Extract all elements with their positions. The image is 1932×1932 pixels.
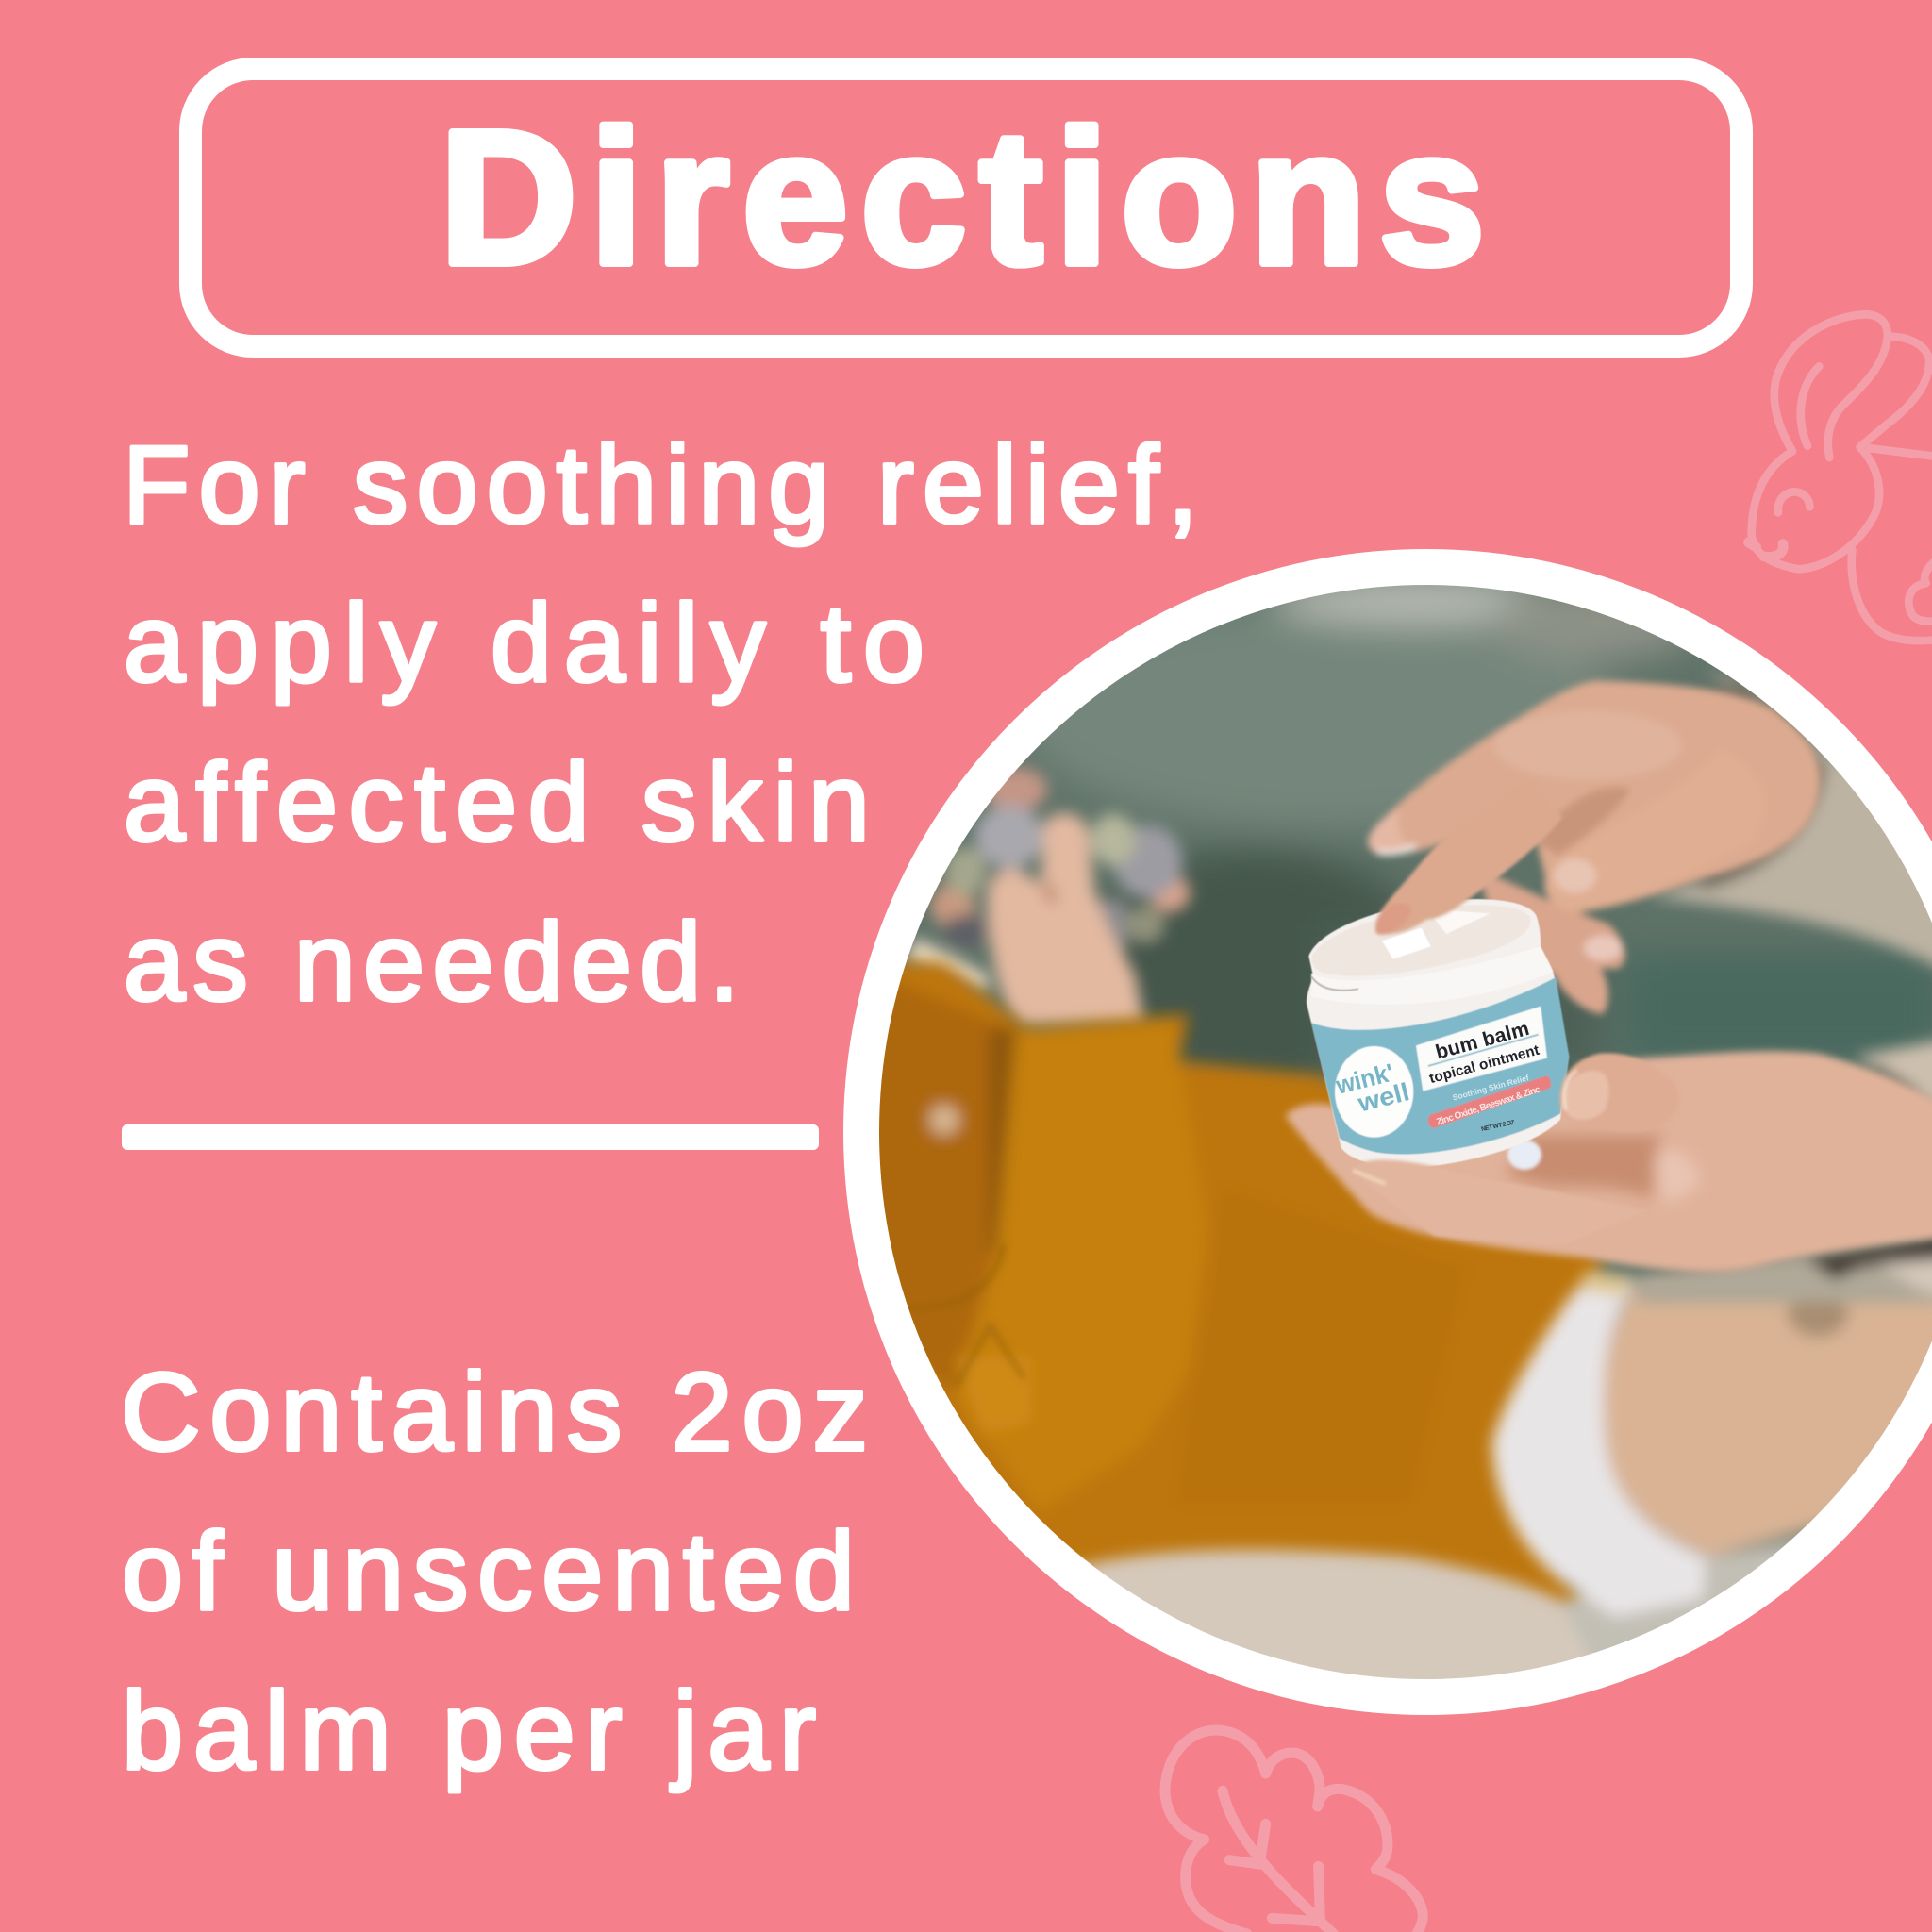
ingredients pill: [1428, 1076, 1551, 1128]
divider: [122, 1124, 819, 1150]
jar interior: [1312, 905, 1531, 976]
text block: directions for use: apply daily to: [124, 581, 924, 705]
photo: palm shadow: [1507, 1135, 1699, 1205]
cream dollop: [1382, 927, 1431, 959]
photo: adult lower sleeve: [1639, 1038, 1932, 1302]
thumb and lower finger: [1353, 1053, 1679, 1245]
label text: topical ointment: topical ointment: [1427, 1042, 1541, 1087]
text block: jar contents: balm per jar: [122, 1669, 816, 1792]
product name panel: [1416, 1007, 1547, 1091]
logo circle: [1335, 1046, 1413, 1138]
icon: leaf outline: [1165, 1730, 1423, 1932]
photo: orange sweater: [879, 951, 1609, 1609]
index finger: [1374, 815, 1561, 937]
photo ring: [861, 567, 1932, 1697]
text block: jar contents: [121, 1350, 868, 1792]
label text: soothing skin relief: Soothing Skin Relief: [1452, 1073, 1530, 1103]
logo text: well: [1354, 1077, 1412, 1118]
photo: blanket, leg and diaper: [1072, 1270, 1932, 1729]
text block: directions for use: as needed.: [124, 900, 740, 1024]
back fingers behind the jar: [1477, 868, 1625, 1014]
label text: ingredients: Zinc Oxide, Beeswax & Zinc: [1436, 1084, 1542, 1127]
icon: cream drop: [1507, 1140, 1541, 1170]
title frame: [191, 69, 1741, 346]
jar label: [1311, 977, 1569, 1155]
photo: balm jar: [1307, 899, 1569, 1167]
text block: directions for use: [123, 423, 1198, 1024]
text block: jar contents: Contains 2oz: [121, 1350, 868, 1474]
text block: directions for use: For soothing relief,: [123, 423, 1198, 546]
photo background: sofa: [1019, 575, 1932, 1094]
label text: bum balm: bum balm: [1433, 1017, 1531, 1063]
logo text: [1336, 1064, 1409, 1111]
photo: adult upper sleeve: [1647, 667, 1932, 974]
photo: adult upper hand: [1368, 681, 1821, 1014]
photo: sweater folds: [955, 1245, 1026, 1385]
circular photo: balm applied from jar: [879, 585, 1932, 1679]
photo: baby hand and toy: [906, 767, 1191, 1025]
text block: jar contents: of unscented: [122, 1509, 855, 1633]
title: Directions: [440, 91, 1485, 304]
text block: directions for use: affected skin: [124, 741, 870, 864]
jar body: [1307, 899, 1569, 1167]
photo: adult palm: [1286, 1051, 1932, 1272]
label text: net weight: NET WT 2 OZ: [1481, 1120, 1515, 1133]
icon: bunny outline: [1748, 314, 1932, 641]
logo text: wink': [1332, 1058, 1396, 1100]
